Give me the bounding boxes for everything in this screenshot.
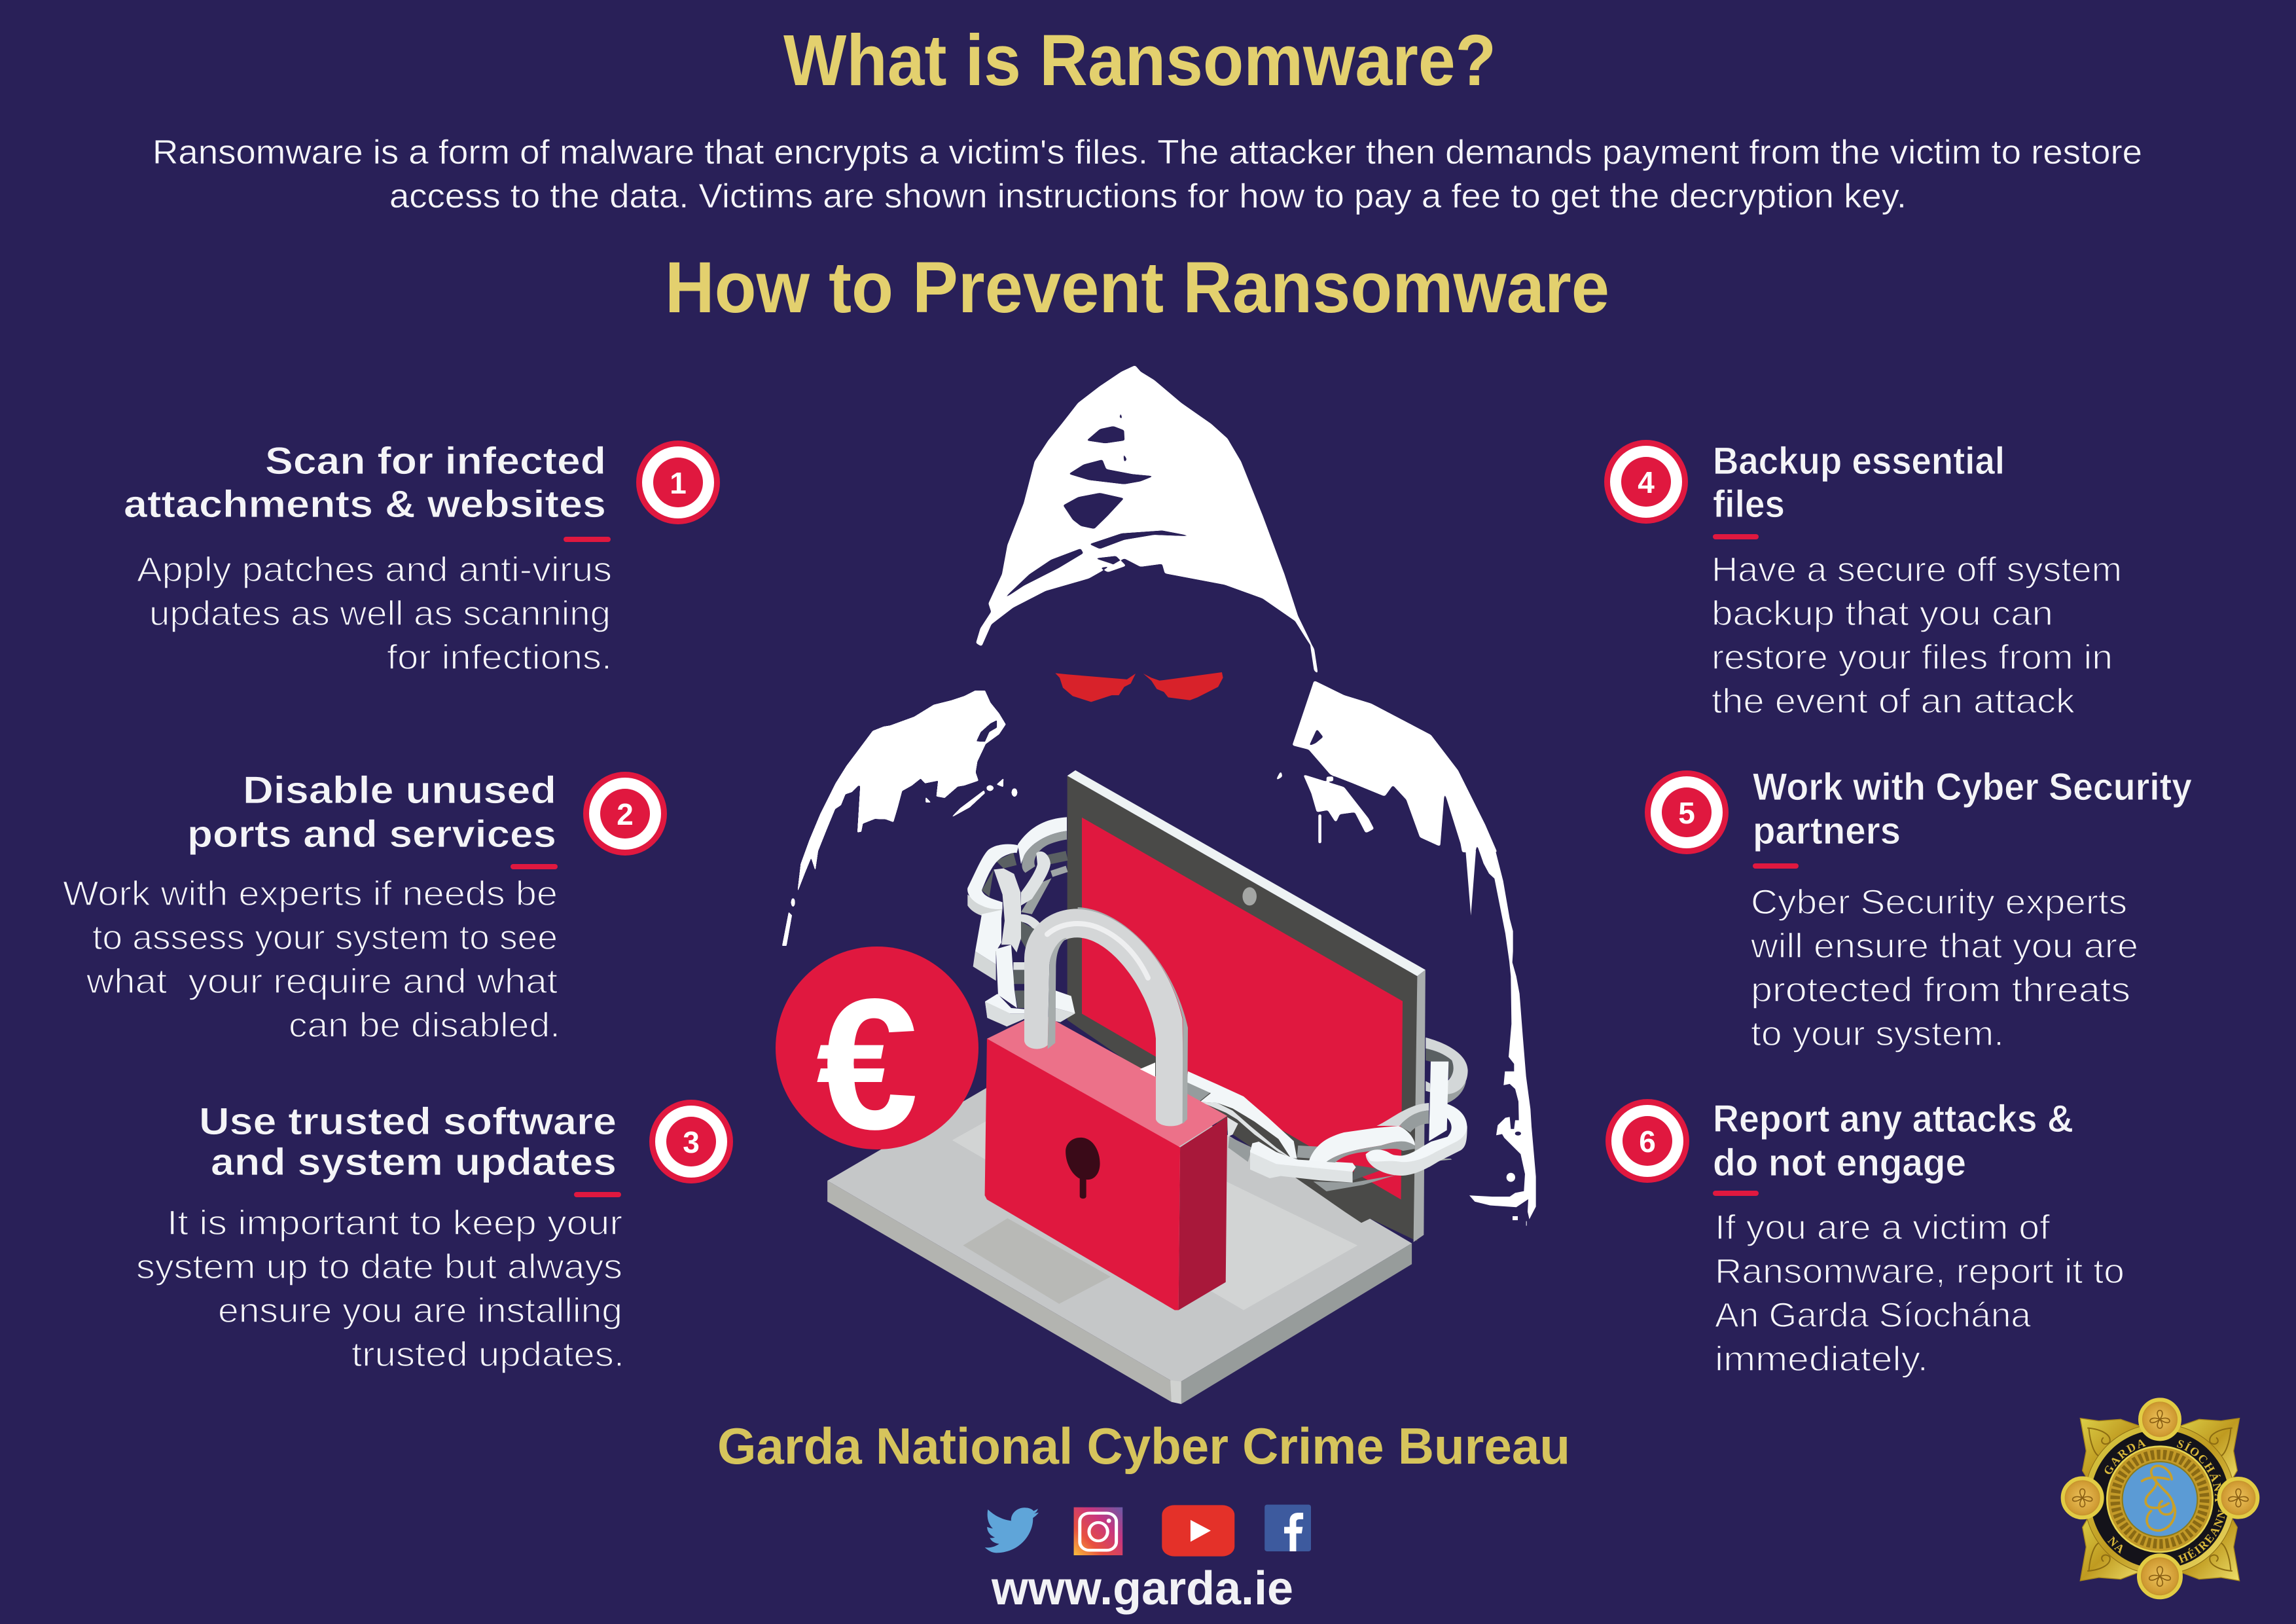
- right cloak edge: [1465, 851, 1536, 1226]
- number badge 3: 3: [683, 1125, 700, 1159]
- body 2: can be disabled.: [289, 1006, 560, 1045]
- badge lettering: [2105, 1439, 2225, 1563]
- footer heading: Garda National Cyber Crime Bureau: Garda National Cyber Crime Bureau: [717, 1417, 1570, 1475]
- body 6: immediately.: [1715, 1340, 1928, 1379]
- social icons: [985, 1505, 1311, 1557]
- padlock side: [1179, 1117, 1227, 1310]
- heading 1: Scan for infected: [265, 440, 606, 482]
- number badge 6: [1605, 1099, 1689, 1183]
- padlock top: [987, 1013, 1227, 1147]
- heading 3: and system updates: [211, 1141, 617, 1183]
- keyhole: [1066, 1138, 1100, 1199]
- body 5: will ensure that you are: [1750, 927, 2138, 965]
- title: What is Ransomware?: What is Ransomware?: [783, 20, 1496, 101]
- body 4: [1712, 550, 2122, 721]
- icon: facebook: [1265, 1505, 1311, 1551]
- eyes: [1055, 672, 1223, 702]
- body 1: [137, 550, 612, 677]
- heading 4: [1713, 440, 2005, 526]
- badge lettering: SÍOCHÁNA: [2177, 1440, 2221, 1502]
- body 6: If you are a victim of: [1715, 1208, 2050, 1247]
- icon: euro coin: [776, 947, 978, 1168]
- body 4: restore your files from in: [1712, 638, 2113, 677]
- outer gold ring: [2085, 1424, 2235, 1574]
- hood and right shoulder: [976, 365, 1497, 852]
- body 1: for infections.: [387, 638, 612, 677]
- website: www.garda.ie: www.garda.ie: [991, 1562, 1293, 1615]
- heading 2: Disable unused: [243, 769, 556, 812]
- panel: step 1 scan: [124, 440, 720, 677]
- roundel knots: [2073, 1411, 2248, 1586]
- heading 4: Backup essential: [1713, 440, 2005, 482]
- icon: instagram: [1074, 1507, 1122, 1555]
- accent bar 5: [1753, 863, 1799, 869]
- body 2: to assess your system to see: [92, 918, 558, 957]
- heading 5: partners: [1753, 810, 1901, 852]
- text block: ransomware definition: [152, 134, 2142, 215]
- body 3: [136, 1204, 624, 1374]
- accent bar 1: [564, 537, 611, 542]
- laptop base: [827, 1041, 1412, 1404]
- body 2: Work with experts if needs be: [63, 875, 558, 913]
- number badge 6: 6: [1639, 1125, 1656, 1159]
- inner gold ring: [2107, 1447, 2213, 1552]
- padlock: [985, 1013, 1227, 1310]
- left chain: [967, 817, 1075, 1026]
- heading 2: ports and services: [187, 813, 556, 856]
- body 3: system up to date but always: [136, 1248, 622, 1286]
- heading 5: Work with Cyber Security: [1753, 766, 2192, 808]
- text block: ransomware definition: Ransomware is a form of malware that encrypts a victim's files. The attacker then demands payment from the victim to restore: [152, 134, 2142, 171]
- panel: step 3 trusted: [136, 1100, 733, 1374]
- heading 1: attachments & websites: [124, 483, 606, 526]
- heading: How to Prevent Ransomware: How to Prevent Ransomware: [665, 247, 1609, 328]
- accent bar 3: [574, 1192, 621, 1197]
- heading 2: [187, 769, 556, 856]
- badge lettering: HÉIREANN: [2178, 1509, 2225, 1563]
- black ring: [2090, 1430, 2229, 1568]
- icon: youtube: [1162, 1505, 1234, 1557]
- number badge 3: [649, 1100, 733, 1183]
- heading 6: Report any attacks &: [1713, 1098, 2073, 1140]
- body 3: It is important to keep your: [167, 1204, 622, 1242]
- heading 4: files: [1713, 483, 1785, 526]
- roundels: [2063, 1399, 2257, 1597]
- logo: Garda Síochána badge: [2060, 1398, 2259, 1600]
- left shoulder: [782, 691, 1017, 946]
- body 2: what your require and what: [86, 962, 558, 1001]
- body 4: backup that you can: [1712, 594, 2053, 633]
- body 6: An Garda Síochána: [1715, 1296, 2032, 1335]
- shackle: [1024, 907, 1188, 1126]
- badge lettering: NA: [2108, 1536, 2123, 1554]
- accent bar 2: [511, 864, 558, 869]
- number badge 2: 2: [617, 797, 634, 831]
- number badge 4: 4: [1638, 465, 1655, 499]
- panel: step 6 report: [1605, 1098, 2125, 1379]
- badge corners: [2080, 1418, 2240, 1581]
- body 3: trusted updates.: [351, 1335, 624, 1374]
- body 2: [63, 875, 560, 1045]
- number badge 1: 1: [670, 466, 687, 500]
- text block: ransomware definition: access to the data. Victims are shown instructions for how to pay a fee to get the decryption key.: [389, 177, 1907, 215]
- body 1: updates as well as scanning: [149, 594, 611, 633]
- panel: step 2 disable: [63, 769, 667, 1045]
- body 4: Have a secure off system: [1712, 550, 2122, 589]
- corner swirls: [2088, 1428, 2232, 1571]
- number badge 5: 5: [1678, 796, 1695, 830]
- padlock front: [985, 1039, 1180, 1310]
- icon: euro coin: €: [816, 960, 918, 1168]
- body 5: to your system.: [1751, 1015, 2004, 1053]
- body 5: Cyber Security experts: [1751, 883, 2127, 922]
- heading 5: [1753, 766, 2192, 852]
- number badge 4: [1604, 440, 1688, 524]
- heading 6: [1713, 1098, 2073, 1184]
- heading 6: do not engage: [1713, 1142, 1966, 1184]
- accent bar 4: [1713, 534, 1759, 539]
- heading 3: [199, 1100, 617, 1183]
- icon: twitter: [985, 1507, 1039, 1553]
- number badge 5: [1645, 770, 1729, 854]
- number badge 2: [583, 772, 667, 856]
- body 1: Apply patches and anti-virus: [137, 550, 612, 589]
- body 6: [1715, 1208, 2125, 1379]
- body 6: Ransomware, report it to: [1715, 1252, 2125, 1291]
- right chain: [1187, 1038, 1468, 1191]
- body 5: protected from threats: [1751, 971, 2130, 1009]
- panel: step 4 backup: [1604, 440, 2122, 721]
- heading 1: [124, 440, 606, 526]
- heading 3: Use trusted software: [199, 1100, 617, 1143]
- badge lettering: GARDA: [2105, 1439, 2146, 1474]
- accent bar 6: [1713, 1191, 1759, 1196]
- body 5: [1750, 883, 2138, 1053]
- body 4: the event of an attack: [1712, 682, 2075, 721]
- blue centre: [2123, 1462, 2197, 1537]
- illustration: laptop: [827, 770, 1426, 1404]
- number badge 1: [636, 441, 720, 524]
- illustration: hooded hacker: [782, 365, 1536, 1226]
- body 3: ensure you are installing: [218, 1291, 622, 1330]
- panel: step 5 partners: [1645, 766, 2192, 1053]
- laptop screen: [1067, 770, 1426, 1242]
- SS monogram: [2142, 1466, 2175, 1530]
